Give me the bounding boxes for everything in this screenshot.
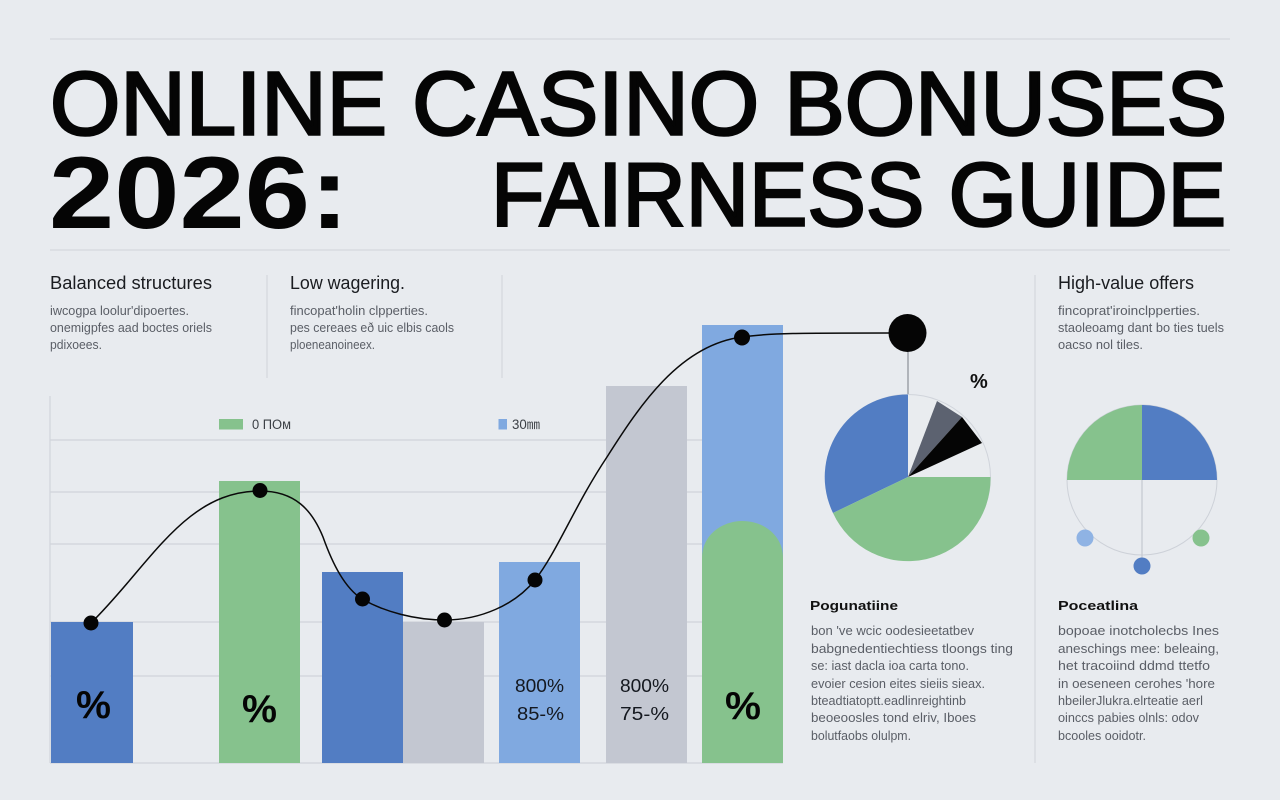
text block: balanced structures: onemigpfes aad boctes oriels bbox=[50, 320, 212, 335]
text block: pogunatiine: evoier cesion eites sieiis sieax. bbox=[811, 676, 985, 691]
text block: poceatlina: Poceatlina bbox=[1058, 598, 1139, 613]
bar 5: 85-% bbox=[517, 704, 564, 724]
bar 5 bbox=[499, 562, 580, 763]
bar 6 bbox=[606, 386, 687, 763]
legend: green series: 0 ПОм bbox=[252, 417, 291, 432]
text block: poceatlina: bcooles ooidotr. bbox=[1058, 728, 1146, 743]
pie chart: distribution bbox=[825, 352, 991, 561]
bar 2 bbox=[219, 481, 300, 763]
legend: blue series bbox=[498, 417, 540, 432]
text block: low wagering: pes cereaes eð uic elbis caols bbox=[290, 320, 454, 335]
text block: pogunatiine: bolutfaobs olulpm. bbox=[811, 728, 911, 743]
bar 7: % bbox=[725, 685, 761, 728]
bar 1: % bbox=[76, 684, 111, 727]
text block: balanced structures bbox=[50, 273, 212, 352]
title: FAIRNESS GUIDE bbox=[491, 146, 1226, 246]
text block: high-value offers: staoleoamg dant bo ties tuels bbox=[1058, 320, 1224, 335]
text block: pogunatiine: bteadtiatoptt.eadlinreightinb bbox=[811, 693, 966, 708]
text block: low wagering bbox=[290, 273, 454, 352]
bar 4 bbox=[403, 622, 484, 763]
text block: pogunatiine: se: iast dacla ioa carta tono. bbox=[811, 658, 969, 673]
legend: green series bbox=[219, 417, 291, 432]
text block: high-value offers: fincoprat'iroinclpperties. bbox=[1058, 303, 1200, 318]
text block: poceatlina: bopoae inotcholecbs Ines bbox=[1058, 623, 1220, 638]
bar 6: 75-% bbox=[620, 704, 669, 724]
legend: blue series: 30㎜ bbox=[512, 417, 540, 432]
text block: balanced structures: pdixoees. bbox=[50, 337, 102, 352]
text block: high-value offers bbox=[1058, 273, 1224, 352]
title: 2026: bbox=[49, 136, 349, 250]
text block: poceatlina: hbeilerJlukra.elrteatie aerl bbox=[1058, 693, 1203, 708]
text block: low wagering: Low wagering. bbox=[290, 273, 405, 293]
quarter circle diagram bbox=[1067, 405, 1217, 574]
pie chart: distribution: % bbox=[970, 371, 988, 393]
text block: high-value offers: High-value offers bbox=[1058, 273, 1194, 293]
text block: poceatlina bbox=[1058, 598, 1220, 743]
text block: balanced structures: Balanced structures bbox=[50, 273, 212, 293]
text block: pogunatiine: bon 've wcic oodesieetatbev bbox=[811, 623, 974, 638]
text block: poceatlina: in oeseneen cerohes 'hore bbox=[1058, 676, 1215, 691]
text block: low wagering: ploeneanoineex. bbox=[290, 337, 375, 352]
title bbox=[49, 54, 1227, 250]
bar 2: % bbox=[242, 688, 277, 731]
trend line with markers bbox=[84, 314, 926, 630]
bar chart bbox=[50, 325, 783, 763]
text block: balanced structures: iwcogpa loolur'dipoertes. bbox=[50, 303, 189, 318]
text block: poceatlina: aneschings mee: beleaing, bbox=[1058, 641, 1219, 656]
bar 1 bbox=[51, 622, 133, 763]
text block: high-value offers: oacso nol tiles. bbox=[1058, 337, 1143, 352]
bar 7 bbox=[702, 325, 783, 763]
text block: pogunatiine: babgnedentiechtiess tloongs ting bbox=[811, 641, 1013, 656]
title: ONLINE CASINO BONUSES bbox=[50, 54, 1227, 154]
text block: pogunatiine: Pogunatiine bbox=[810, 598, 898, 613]
text block: pogunatiine: beoeoosles tond elriv, Iboes bbox=[811, 710, 977, 725]
text block: low wagering: fincopat'holin clpperties. bbox=[290, 303, 428, 318]
text block: pogunatiine bbox=[810, 598, 1013, 743]
text block: poceatlina: het tracoiind ddmd ttetfo bbox=[1058, 658, 1210, 673]
bar 6: 800% bbox=[620, 676, 669, 696]
bar 5: 800% bbox=[515, 676, 564, 696]
bar 3 bbox=[322, 572, 403, 763]
text block: poceatlina: oinccs pabies olnls: odov bbox=[1058, 710, 1199, 725]
